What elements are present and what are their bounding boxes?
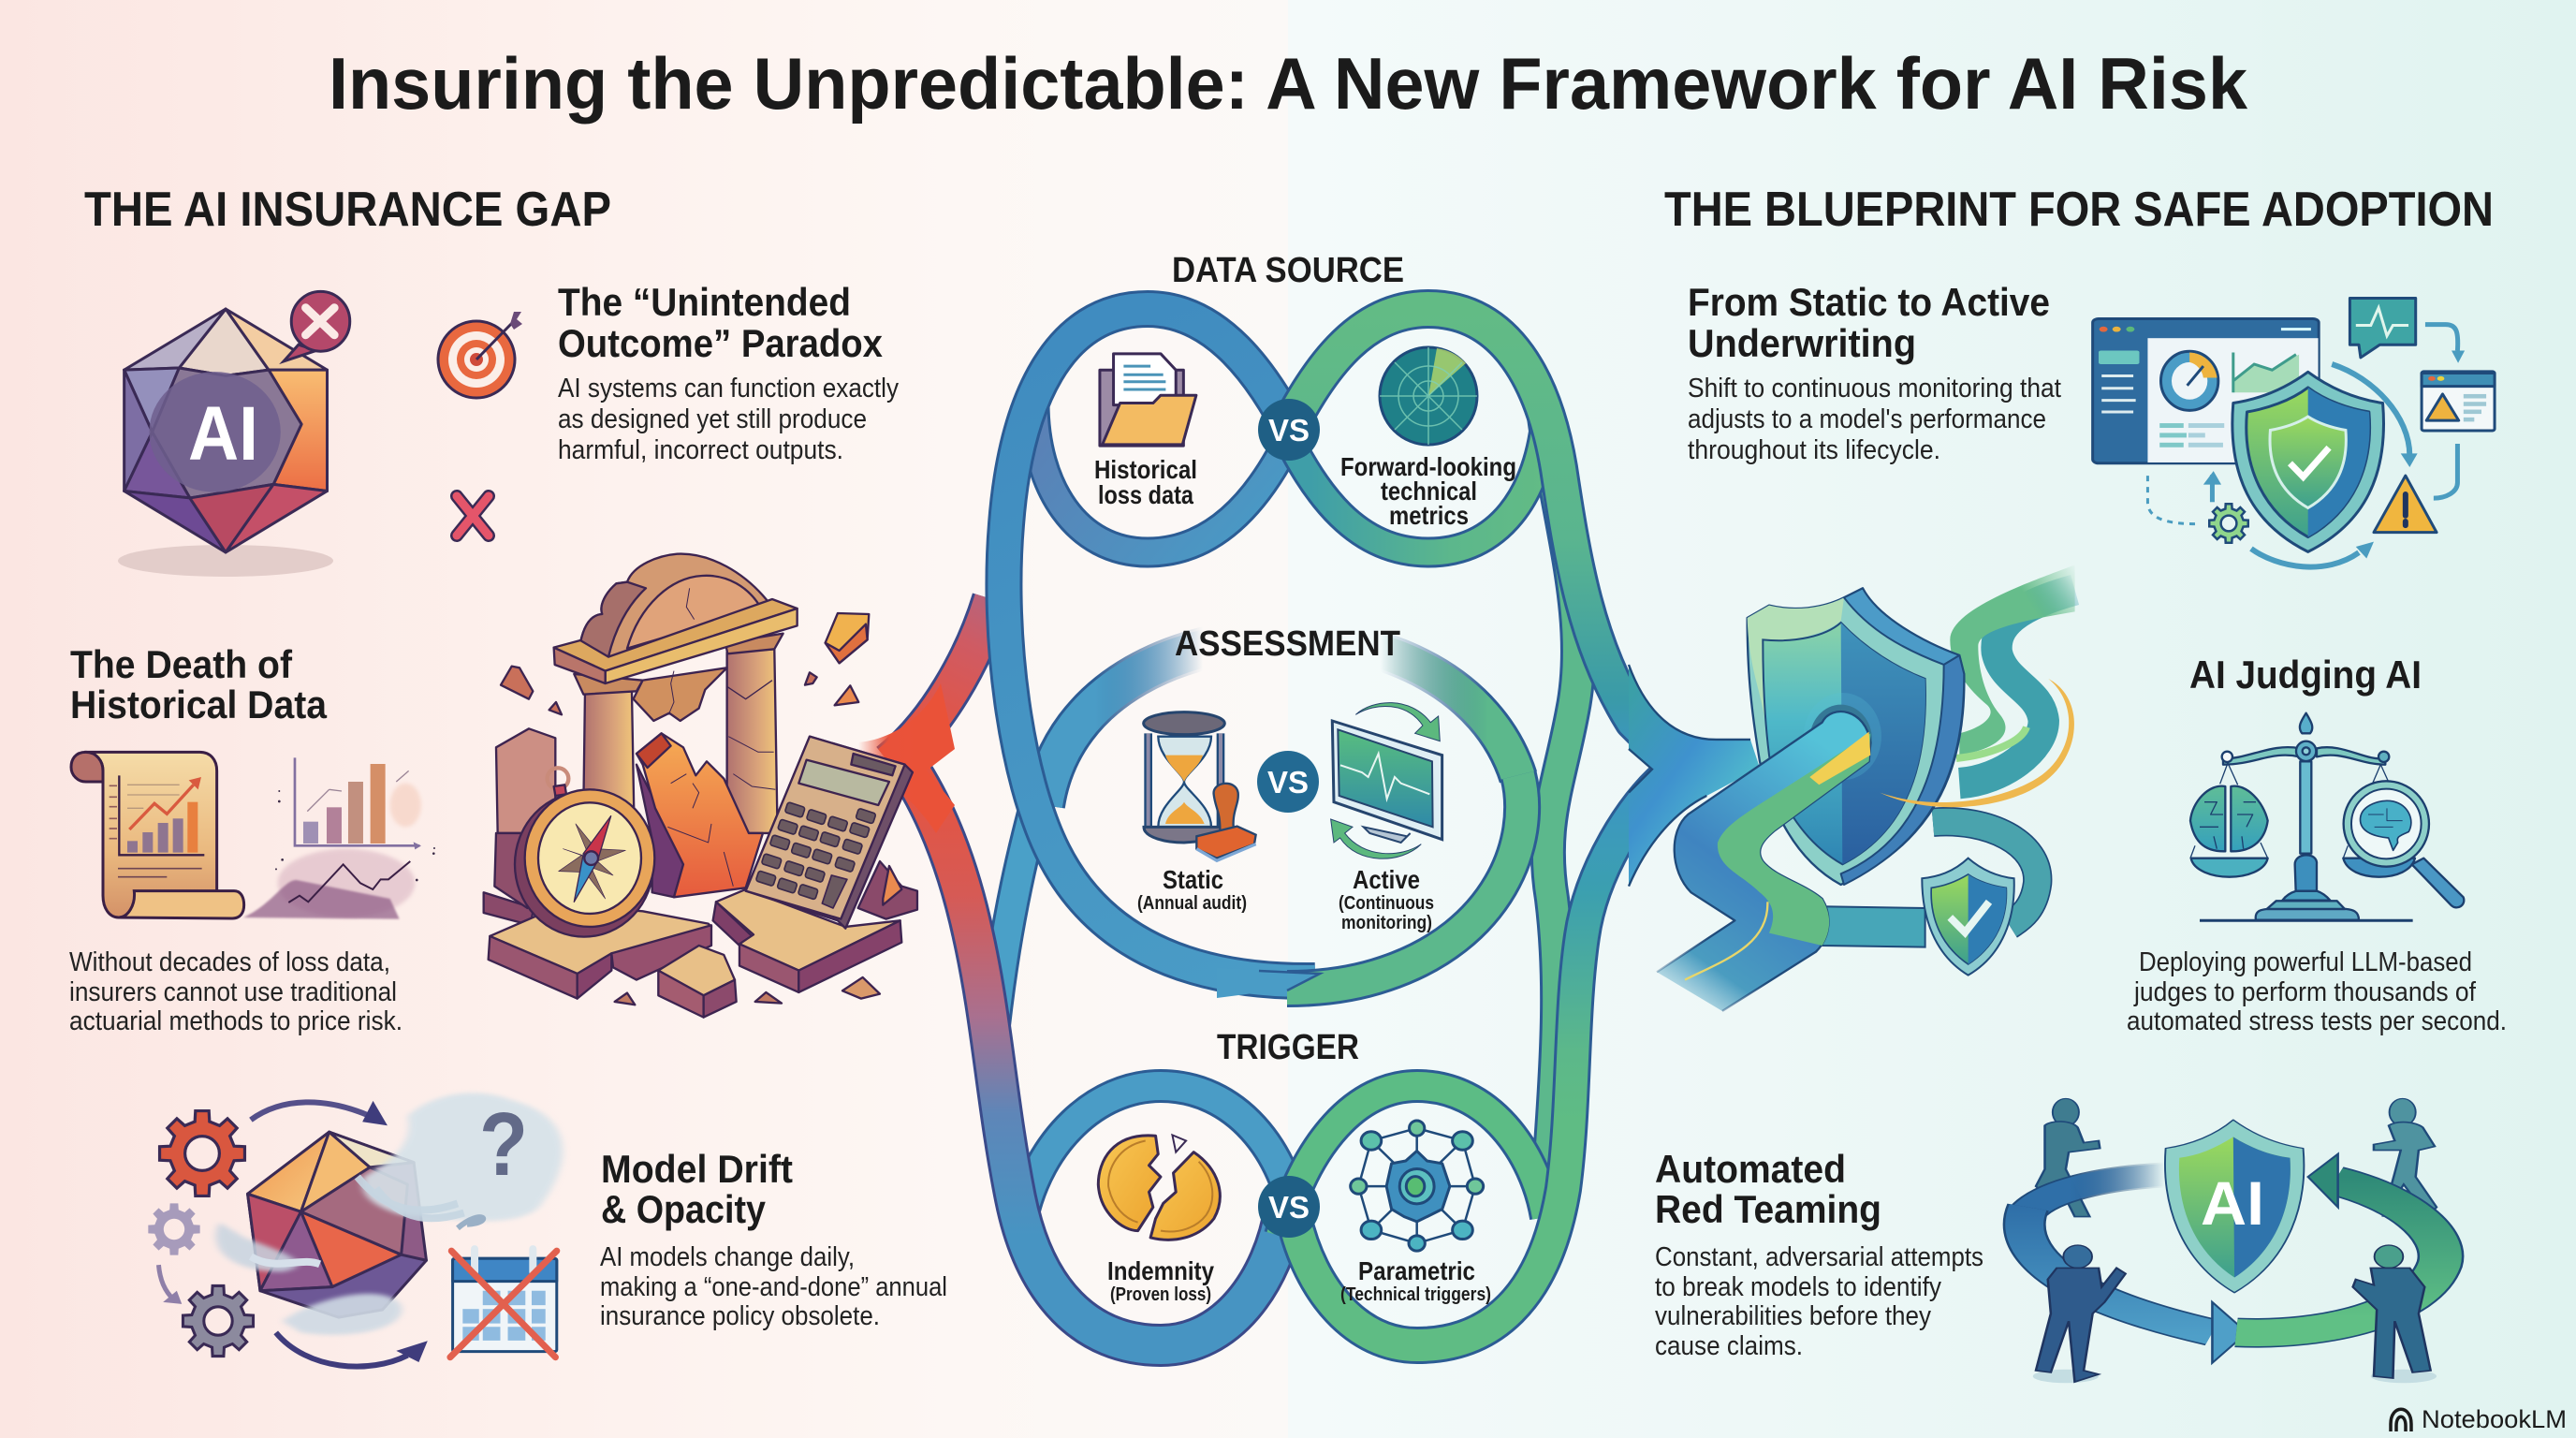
icon: scroll with rising chart — [71, 752, 244, 918]
text: red teaming body: vulnerabilities before they — [1655, 1301, 1931, 1331]
text: paradox body: AI systems can function exactly — [558, 374, 899, 404]
heading: model drift and opacity — [601, 1147, 793, 1231]
text: red teaming body — [1655, 1242, 1983, 1361]
text: AI judging body — [2127, 947, 2507, 1036]
text: historical data body — [69, 947, 402, 1036]
ribbon: left converging red strand — [858, 599, 1296, 1345]
text: historical data body: insurers cannot use traditional — [69, 977, 397, 1007]
heading: model drift and opacity: Model Drift — [601, 1147, 793, 1191]
text: paradox body: harmful, incorrect outputs. — [558, 435, 843, 465]
text: red teaming body: to break models to identify — [1655, 1272, 1941, 1302]
ribbon: left strand from data source to assessment — [1003, 309, 1315, 981]
icon: drifting gem with gears and fog — [148, 1093, 563, 1367]
label: assessment: ASSESSMENT — [1175, 624, 1400, 664]
text: model drift body — [600, 1242, 947, 1331]
icon: broken coin — [1098, 1135, 1220, 1240]
icon: hourglass and stamp — [1144, 712, 1256, 860]
ribbon: assessment upper-right fading arc — [1290, 638, 1518, 777]
ribbon: right rear strands — [1281, 412, 1578, 1236]
text: historical loss data: Historical — [1094, 455, 1197, 484]
heading: AI judging AI: AI Judging AI — [2189, 653, 2422, 697]
heading: from static to active underwriting: Underwriting — [1688, 321, 1916, 365]
ribbon: right strand from shield to trigger — [1294, 777, 1666, 1345]
text: indemnity: (Proven loss) — [1110, 1284, 1211, 1305]
text: active: monitoring) — [1341, 913, 1432, 933]
text: forward-looking technical metrics: metrics — [1389, 501, 1469, 530]
text: model drift body: insurance policy obsolete. — [600, 1301, 880, 1331]
ribbon: right strand from data source to shield — [1282, 309, 1666, 754]
panel: the AI insurance gap — [69, 280, 947, 1367]
icon: faceted AI gem with error bubble: AI — [188, 391, 258, 477]
chart: central braided comparison ribbon — [858, 251, 1666, 1345]
text: paradox body: as designed yet still produce — [558, 404, 867, 434]
text: AI judging body: Deploying powerful LLM-based — [2139, 947, 2472, 977]
vs badge: data source — [1258, 399, 1320, 461]
label: trigger: TRIGGER — [1217, 1028, 1359, 1067]
text: indemnity — [1107, 1256, 1214, 1305]
text: model drift body: AI models change daily, — [600, 1242, 855, 1272]
text: indemnity: Indemnity — [1107, 1256, 1214, 1285]
vs badge: trigger — [1258, 1176, 1320, 1238]
text: forward-looking technical metrics — [1340, 452, 1516, 530]
vs badge: data source: VS — [1268, 413, 1310, 448]
heading: model drift and opacity: & Opacity — [601, 1187, 767, 1231]
icon: scales with brains and magnifier — [2190, 713, 2464, 920]
logo: NotebookLM: NotebookLM — [2422, 1405, 2567, 1433]
ribbon: data source left loop — [1034, 403, 1296, 552]
icon: monitor with cycle arrows — [1331, 703, 1442, 858]
panel: the blueprint for safe adoption — [1629, 280, 2567, 1433]
text: active: Active — [1353, 865, 1420, 894]
icon: parametric network — [1351, 1121, 1484, 1251]
text: AI judging body: automated stress tests per second. — [2127, 1006, 2507, 1036]
vs badge: trigger: VS — [1268, 1190, 1310, 1225]
text: forward-looking technical metrics: Forward-looking — [1340, 452, 1516, 481]
text: AI judging body: judges to perform thousands of — [2133, 977, 2477, 1007]
text: active: (Continuous — [1339, 893, 1434, 914]
ribbon: assessment upper-left fading arc — [1044, 638, 1290, 805]
heading: automated red teaming: Automated — [1655, 1147, 1846, 1191]
illustration: crumbling ruin, compass and calculator — [484, 554, 917, 1018]
text: static — [1137, 865, 1247, 914]
heading: automated red teaming: Red Teaming — [1655, 1187, 1881, 1231]
heading: automated red teaming — [1655, 1147, 1881, 1231]
text: parametric: (Technical triggers) — [1340, 1284, 1491, 1305]
text: forward-looking technical metrics: technical — [1381, 477, 1477, 506]
heading: the unintended outcome paradox: Outcome” Paradox — [558, 321, 884, 365]
heading: the death of historical data: The Death of — [70, 642, 293, 686]
heading: the unintended outcome paradox — [558, 280, 884, 365]
text: historical data body: Without decades of loss data, — [69, 947, 390, 977]
text: model drift body: making a “one-and-done” annual — [600, 1272, 947, 1302]
heading: from static to active underwriting: From Static to Active — [1688, 280, 2050, 324]
text: active — [1339, 865, 1434, 933]
text: red teaming body: cause claims. — [1655, 1331, 1803, 1361]
text: underwriting body: adjusts to a model's performance — [1688, 404, 2046, 434]
text: historical loss data — [1094, 455, 1197, 509]
text: static: Static — [1163, 865, 1223, 894]
heading: the death of historical data: Historical Data — [70, 682, 328, 726]
text: red teaming body: Constant, adversarial attempts — [1655, 1242, 1983, 1272]
heading: from static to active underwriting — [1688, 280, 2050, 365]
text: parametric — [1340, 1256, 1491, 1305]
text: static: (Annual audit) — [1137, 893, 1247, 914]
icon: red cross — [457, 496, 489, 536]
ribbon: assessment lower-right arc — [1217, 775, 1522, 998]
heading: the unintended outcome paradox: The “Unintended — [558, 280, 851, 324]
text: historical loss data: loss data — [1098, 480, 1193, 509]
text: underwriting body: Shift to continuous monitoring that — [1688, 374, 2061, 404]
vs badge: assessment — [1257, 751, 1319, 813]
heading: the blueprint for safe adoption: THE BLUEPRINT FOR SAFE ADOPTION — [1664, 183, 2494, 237]
text: underwriting body: throughout its lifecycle. — [1688, 435, 1940, 465]
heading: the AI insurance gap: THE AI INSURANCE GAP — [84, 183, 611, 237]
label: data source: DATA SOURCE — [1172, 251, 1404, 290]
heading: the death of historical data — [70, 642, 328, 726]
icon: faceted AI gem with error bubble — [118, 291, 350, 577]
icon: red team circle around AI shield — [2024, 1098, 2440, 1383]
icon: monitoring dashboard with shield — [2093, 298, 2495, 567]
text: paradox body — [558, 374, 899, 465]
text: underwriting body — [1688, 374, 2061, 465]
text: parametric: Parametric — [1358, 1256, 1475, 1285]
text: historical data body: actuarial methods to price risk. — [69, 1006, 402, 1036]
vs badge: assessment: VS — [1267, 765, 1309, 800]
icon: drifting gem with gears and fog: ? — [479, 1094, 528, 1195]
title: Insuring the Unpredictable: A New Framework for AI Risk — [329, 42, 2248, 125]
icon: radar — [1380, 347, 1477, 445]
icon: decaying chart — [243, 757, 435, 919]
icon: target with arrow — [438, 312, 522, 398]
icon: red team circle around AI shield: AI — [2201, 1168, 2264, 1238]
icon: folder of historical loss data — [1100, 354, 1196, 446]
illustration: main shield threaded by ribbon — [1629, 565, 2075, 1011]
